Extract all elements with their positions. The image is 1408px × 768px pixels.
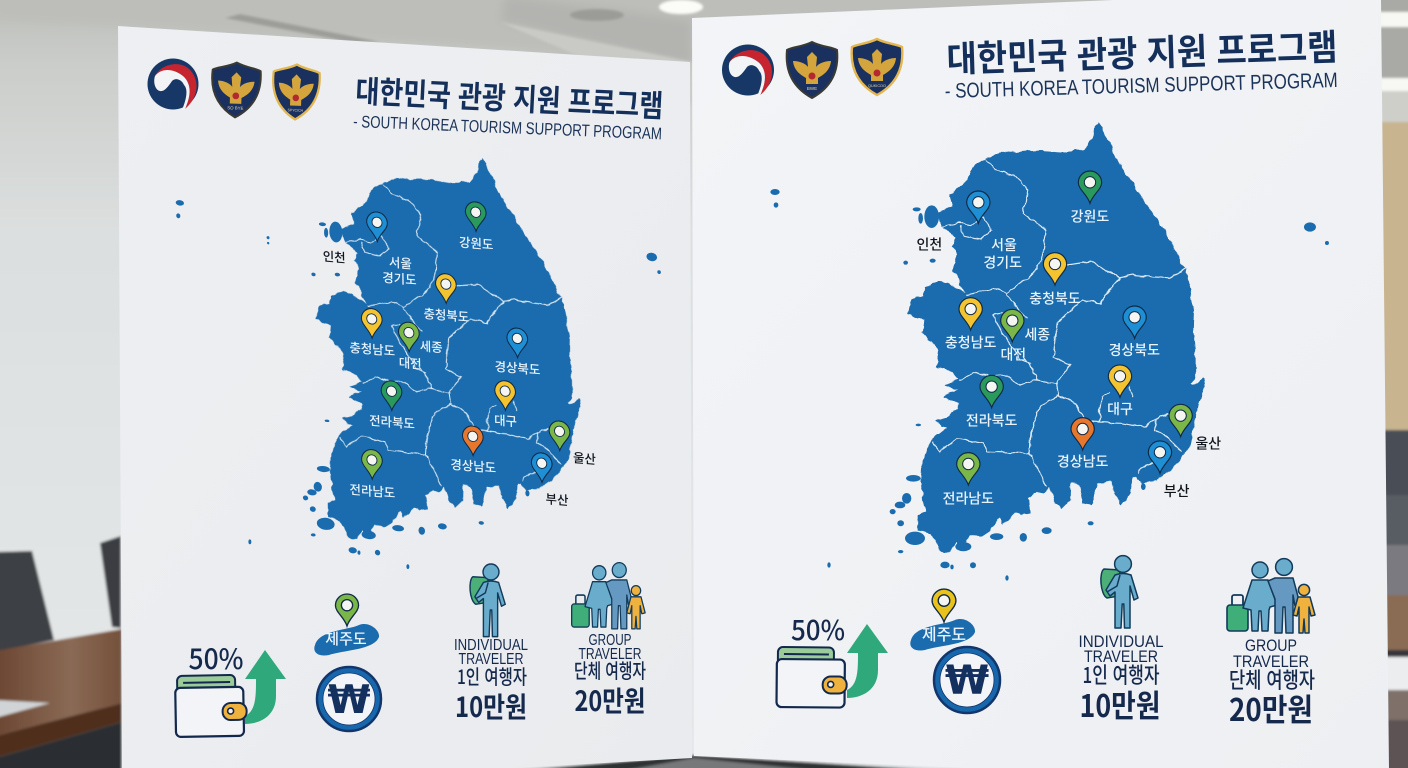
region labels: left map: 충청북도 bbox=[423, 303, 469, 326]
pin: 충청남도 bbox=[361, 308, 382, 339]
wallet with 50% increase: left poster bbox=[175, 638, 286, 737]
region labels: right map: 인천 bbox=[916, 234, 942, 254]
pin: 충청북도 bbox=[1043, 253, 1067, 285]
wallet with 50% increase: right poster: 50% bbox=[791, 609, 845, 648]
region labels: right map: 세종 bbox=[1024, 324, 1050, 344]
region labels: left map: 강원도 bbox=[459, 231, 493, 254]
region labels: right map: 대전 bbox=[1000, 344, 1026, 364]
region labels: left map bbox=[322, 220, 597, 518]
pin: 대전 bbox=[398, 321, 420, 353]
pin: 서울 bbox=[367, 211, 388, 242]
pin: 경상남도 bbox=[462, 425, 483, 456]
pin: 전라남도 bbox=[361, 449, 383, 480]
individual traveler: left poster: 1인 여행자 bbox=[457, 661, 527, 690]
group traveler: left poster bbox=[572, 563, 646, 720]
pin: 전라북도 bbox=[980, 375, 1003, 408]
pin: 대전 bbox=[1001, 309, 1024, 342]
group traveler: left poster: GROUP bbox=[588, 632, 632, 649]
logos: right poster bbox=[722, 39, 902, 98]
title: right poster: 대한민국 관광 지원 프로그램 bbox=[946, 19, 1338, 83]
subtitle: left poster: - SOUTH KOREA TOURISM SUPPORT PROGRAM bbox=[353, 112, 662, 143]
pin: 부산 bbox=[1148, 441, 1172, 473]
pin: 울산 bbox=[549, 420, 570, 451]
pin: 충청남도 bbox=[959, 298, 982, 330]
icon: police badge 1: BWE bbox=[807, 86, 817, 91]
individual traveler: left poster: 10만원 bbox=[455, 686, 527, 726]
icon: police badge 2 bbox=[272, 64, 320, 120]
region labels: left map: 서울 bbox=[389, 252, 412, 273]
region labels: right map: 강원도 bbox=[1071, 207, 1109, 227]
region labels: left map: 인천 bbox=[323, 245, 346, 267]
pin: 경상남도 bbox=[1071, 418, 1094, 450]
individual traveler: right poster: INDIVIDUAL bbox=[1078, 632, 1164, 651]
region labels: left map: 경기도 bbox=[382, 267, 417, 289]
pin: 강원도 bbox=[1078, 171, 1102, 203]
region labels: right map: 전라남도 bbox=[943, 488, 994, 508]
region labels: right map bbox=[916, 207, 1221, 508]
icon: police badge 1 bbox=[211, 62, 261, 118]
icon: won coin, right poster bbox=[934, 647, 1000, 713]
icon: police badge 2 bbox=[852, 39, 902, 95]
icon: taegeuk emblem bbox=[148, 58, 198, 110]
icon: won coin, left poster bbox=[317, 667, 381, 731]
group traveler: right poster: 20만원 bbox=[1229, 685, 1313, 730]
pin: 경상북도 bbox=[507, 327, 528, 358]
jeju pin and label: left poster bbox=[314, 594, 379, 656]
group traveler: right poster: TRAVELER bbox=[1233, 652, 1309, 671]
icon: police badge 1 bbox=[787, 42, 837, 98]
group traveler: right poster: 단체 여행자 bbox=[1229, 663, 1315, 695]
group traveler: right poster: GROUP bbox=[1245, 636, 1297, 655]
pin: 경상북도 bbox=[1123, 306, 1146, 338]
region labels: left map: 전라남도 bbox=[349, 479, 395, 502]
individual traveler: right poster: TRAVELER bbox=[1084, 647, 1158, 666]
individual traveler: right poster bbox=[1078, 556, 1164, 726]
pin: 전라북도 bbox=[381, 380, 402, 411]
panel: left poster bbox=[118, 26, 692, 768]
region labels: right map: 울산 bbox=[1195, 433, 1221, 453]
individual traveler: left poster: INDIVIDUAL bbox=[454, 637, 528, 654]
region labels: right map: 전라북도 bbox=[966, 411, 1018, 431]
icon: won coin, left poster: ₩ bbox=[327, 678, 371, 723]
pin: 대구 bbox=[495, 380, 516, 411]
region labels: right map: 충청북도 bbox=[1029, 288, 1081, 308]
pin: 강원도 bbox=[465, 201, 486, 232]
icon: won coin, right poster: ₩ bbox=[945, 658, 989, 704]
pin: 울산 bbox=[1169, 404, 1192, 437]
icon: police badge 2: QUKICOO bbox=[868, 84, 886, 88]
group traveler: left poster: TRAVELER bbox=[578, 646, 642, 663]
region labels: right map: 경기도 bbox=[983, 252, 1022, 272]
region labels: right map: 부산 bbox=[1164, 481, 1190, 501]
icon: taegeuk emblem bbox=[722, 44, 774, 96]
region labels: left map: 경상북도 bbox=[494, 356, 540, 379]
individual traveler: right poster: 10만원 bbox=[1080, 681, 1160, 726]
pin: 충청북도 bbox=[435, 273, 457, 304]
panel: right poster bbox=[692, 0, 1389, 768]
individual traveler: right poster: 1인 여행자 bbox=[1082, 658, 1160, 690]
title: left poster: 대한민국 관광 지원 프로그램 bbox=[355, 66, 664, 126]
region labels: left map: 전라북도 bbox=[369, 410, 415, 433]
individual traveler: left poster bbox=[454, 564, 528, 726]
region labels: left map: 경상남도 bbox=[450, 454, 496, 477]
map: right poster bbox=[770, 123, 1329, 581]
pin: 부산 bbox=[531, 452, 552, 483]
region labels: left map: 대구 bbox=[494, 409, 517, 430]
pin: 대구 bbox=[1108, 365, 1132, 397]
region labels: right map: 대구 bbox=[1107, 399, 1133, 419]
icon: police badge 2: SPYCICH bbox=[288, 108, 304, 113]
region labels: left map: 부산 bbox=[545, 488, 569, 509]
region labels: left map: 충청남도 bbox=[349, 337, 395, 360]
region labels: right map: 충청남도 bbox=[945, 332, 997, 352]
map: left poster bbox=[175, 133, 666, 590]
individual traveler: left poster: TRAVELER bbox=[458, 651, 524, 668]
pin: 전라남도 bbox=[957, 453, 980, 485]
group traveler: right poster bbox=[1227, 559, 1315, 730]
region labels: right map: 경상남도 bbox=[1057, 452, 1109, 472]
group traveler: left poster: 단체 여행자 bbox=[574, 655, 646, 684]
logos: left poster bbox=[148, 58, 320, 120]
wallet with 50% increase: left poster: 50% bbox=[188, 638, 244, 678]
region labels: left map: 대전 bbox=[399, 352, 422, 373]
region labels: right map: 경상북도 bbox=[1109, 340, 1160, 360]
group traveler: left poster: 20만원 bbox=[574, 680, 646, 720]
jeju pin and label: right poster: 제주도 bbox=[922, 621, 966, 645]
icon: police badge 1: SO BYE bbox=[227, 105, 244, 111]
wallet with 50% increase: right poster bbox=[776, 609, 888, 708]
jeju pin and label: right poster bbox=[910, 589, 975, 651]
region labels: left map: 울산 bbox=[573, 447, 596, 468]
pin: 서울 bbox=[967, 191, 990, 223]
jeju pin and label: left poster: 제주도 bbox=[325, 628, 367, 649]
region labels: right map: 서울 bbox=[991, 235, 1017, 255]
region labels: left map: 세종 bbox=[420, 335, 443, 356]
